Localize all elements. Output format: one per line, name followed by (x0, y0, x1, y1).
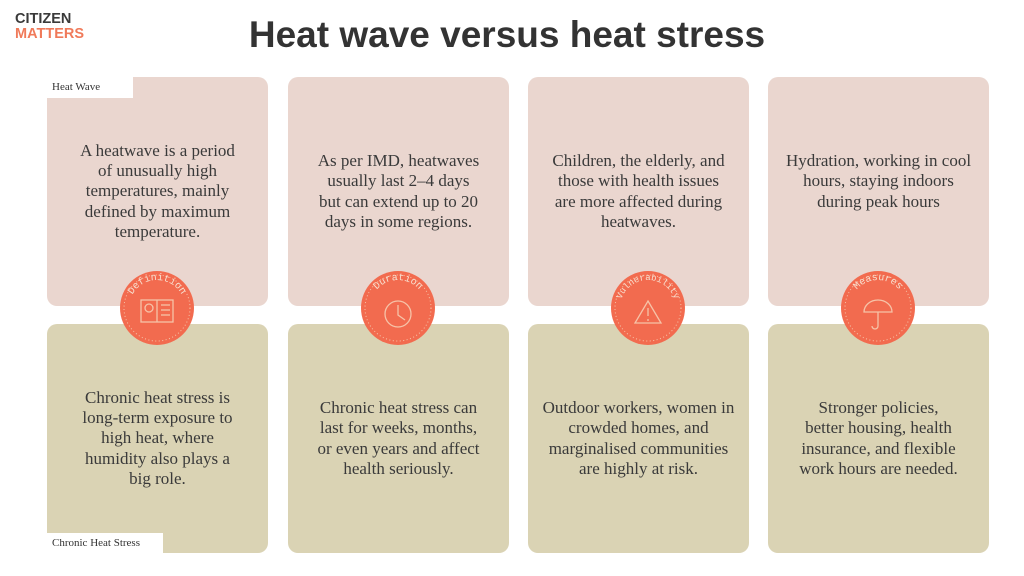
panel: definition chronic (47, 324, 268, 553)
panel: measures chronic: insurance, and flexible (801, 438, 956, 458)
icon: duration: Duration (372, 274, 422, 290)
panel: duration heat wave: usually last 2–4 days (327, 171, 470, 190)
logo: MATTERS (15, 26, 84, 42)
panel: definition chronic: humidity also plays a (85, 449, 230, 468)
panel: vulnerability chronic: crowded homes, and (568, 418, 709, 437)
panel: definition heat wave: A heatwave is a period (80, 141, 235, 160)
label: heat wave (47, 77, 133, 98)
panel: definition chronic: big role. (129, 469, 186, 488)
panel: duration heat wave: days in some regions. (325, 212, 472, 231)
icon: definition: Definition (127, 273, 186, 294)
panel: vulnerability heat wave (528, 77, 749, 306)
panel: measures chronic: Stronger policies, (819, 398, 938, 417)
icon: measures (841, 271, 915, 345)
panel: measures chronic (768, 324, 989, 553)
panel: definition heat wave (47, 77, 268, 306)
panel: vulnerability heat wave: heatwaves. (601, 212, 676, 231)
panel: measures heat wave: Hydration, working in cool (786, 151, 971, 170)
panel: duration heat wave: As per IMD, heatwaves (318, 151, 479, 170)
panel: definition heat wave: of unusually high (98, 161, 217, 180)
panel: duration heat wave (288, 77, 509, 306)
logo (15, 11, 84, 42)
panel: measures heat wave (768, 77, 989, 306)
panel: vulnerability heat wave: Children, the elderly, and (552, 151, 725, 170)
panel: vulnerability heat wave: are more affected during (555, 192, 722, 210)
panel: duration chronic: or even years and affect (317, 438, 480, 458)
panel: vulnerability chronic: are highly at risk. (579, 459, 698, 478)
panel: definition chronic: long-term exposure to (82, 408, 233, 427)
icon: measures: Measures (852, 274, 902, 290)
panel: vulnerability chronic: Outdoor workers, women in (543, 398, 734, 417)
panel: definition heat wave: temperatures, mainly (86, 181, 229, 200)
logo: CITIZEN (15, 11, 71, 27)
label: chronic heat stress: Chronic Heat Stress (52, 537, 140, 549)
panel: vulnerability chronic: marginalised communities (549, 438, 728, 458)
panel: duration chronic (288, 324, 509, 553)
panel: vulnerability heat wave: those with health issues (558, 171, 719, 190)
panel: duration chronic: health seriously. (343, 459, 454, 478)
panel: duration chronic: last for weeks, months, (320, 418, 477, 437)
panel: definition heat wave: defined by maximum (85, 202, 230, 221)
label: chronic heat stress (47, 533, 163, 553)
icon: vulnerability: Vulnerability (616, 274, 679, 298)
panel: definition chronic: Chronic heat stress is (85, 388, 230, 407)
icon: duration (361, 271, 435, 345)
label: heat wave: Heat Wave (52, 81, 100, 93)
panel: duration heat wave: but can extend up to 20 (319, 192, 478, 210)
panel: measures heat wave: during peak hours (817, 192, 940, 211)
panel: measures chronic: better housing, health (805, 418, 952, 437)
icon: vulnerability (611, 271, 685, 345)
panel: definition heat wave: temperature. (115, 222, 200, 241)
panel: vulnerability chronic (528, 324, 749, 553)
panel: definition chronic: high heat, where (101, 428, 214, 447)
panel: measures chronic: work hours are needed. (799, 459, 958, 478)
panel: duration chronic: Chronic heat stress can (320, 398, 477, 417)
panel: measures heat wave: hours, staying indoors (803, 171, 954, 190)
icon: definition (120, 271, 194, 345)
title: Heat wave versus heat stress (249, 14, 765, 55)
